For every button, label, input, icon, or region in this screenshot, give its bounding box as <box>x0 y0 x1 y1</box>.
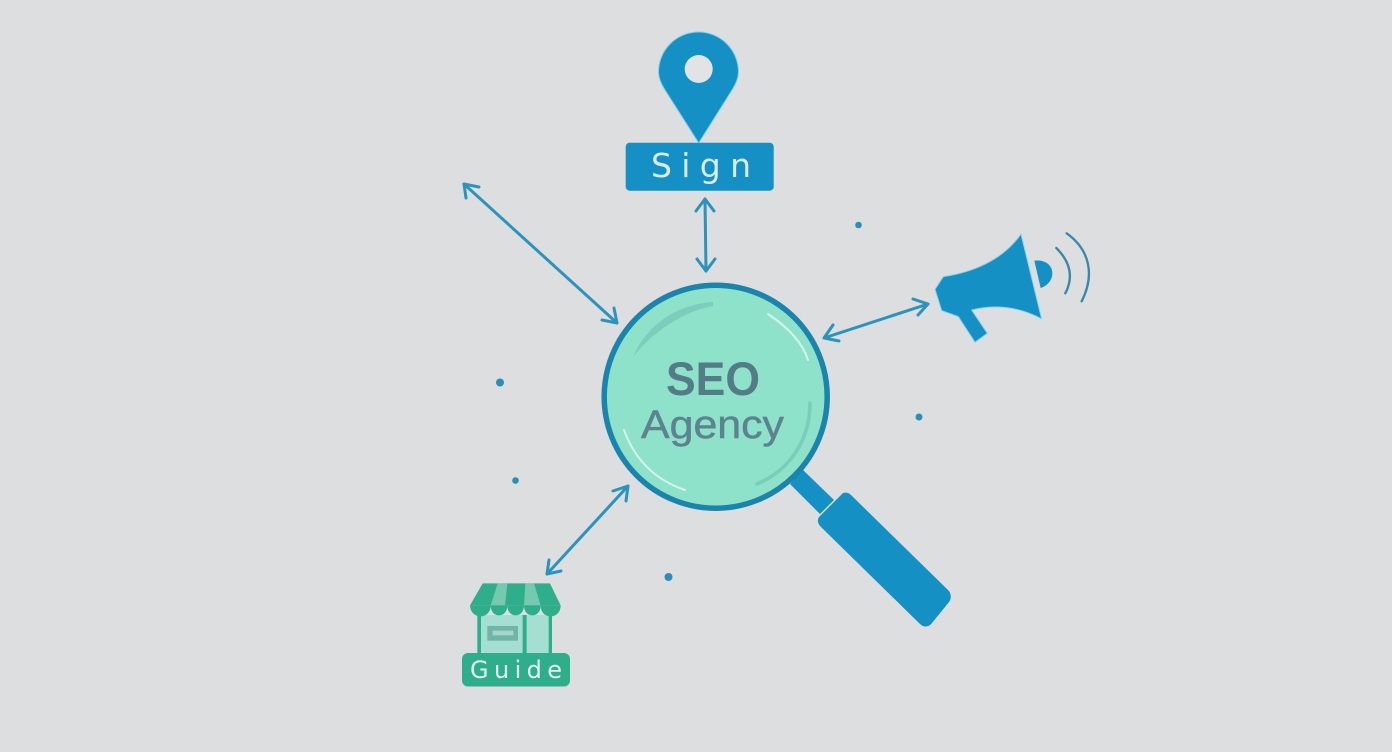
magnifier lens <box>604 285 827 508</box>
lens highlights <box>624 302 810 490</box>
lens label: Agency <box>641 403 784 447</box>
guide label: Guide <box>470 656 562 684</box>
magnifier handle <box>790 470 951 627</box>
arrow: guide to SEO agency <box>547 486 628 574</box>
lens label <box>641 352 784 447</box>
decorative dots <box>496 222 922 581</box>
sign label: Sign <box>651 146 751 185</box>
icon: location pin <box>658 32 738 143</box>
arrow: upper left to SEO agency <box>464 184 617 323</box>
lens label: SEO <box>666 352 760 405</box>
icon: storefront <box>470 583 561 657</box>
arrow: sign to SEO agency <box>696 199 715 271</box>
arrow: megaphone to SEO agency <box>824 299 928 341</box>
icon: magnifying glass <box>604 285 951 627</box>
icon: megaphone <box>935 233 1089 342</box>
sign label <box>626 143 774 191</box>
